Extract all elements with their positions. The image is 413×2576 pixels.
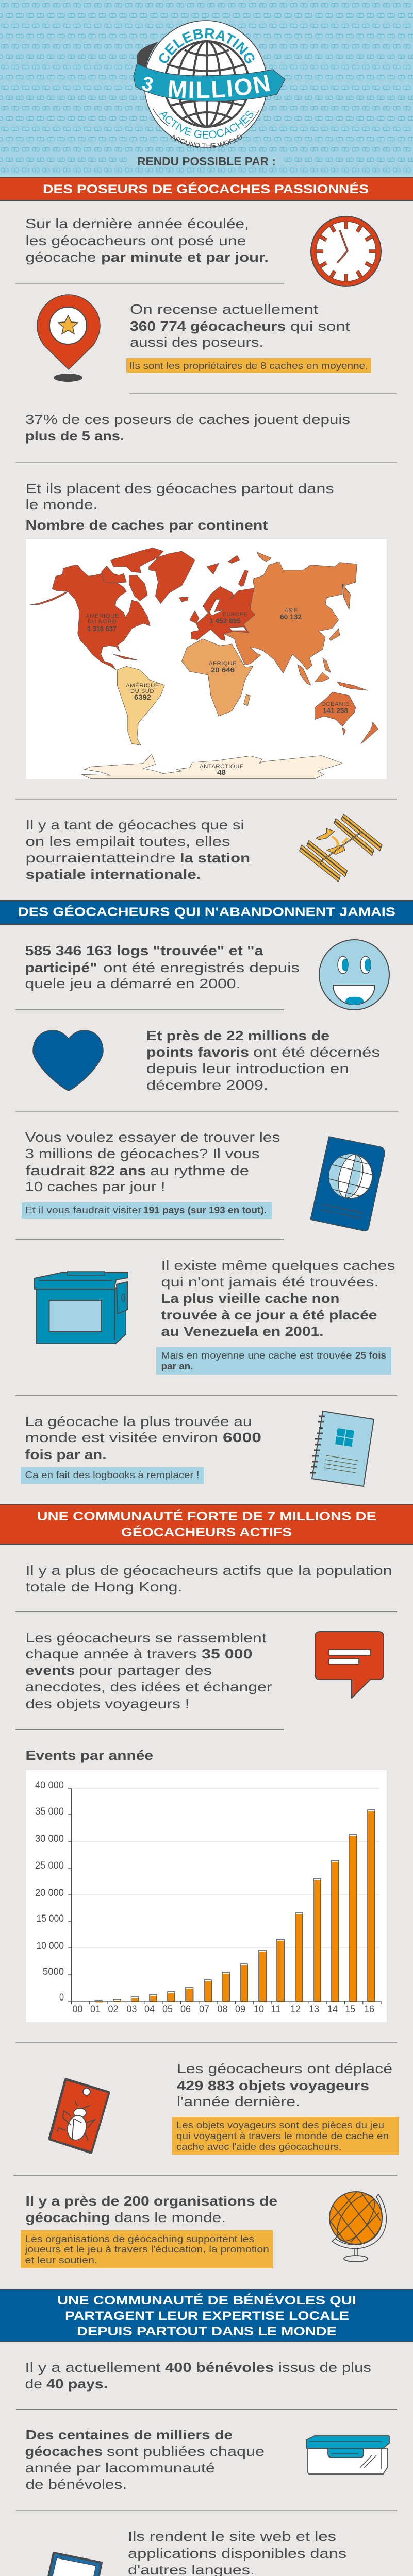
text block: 400 bénévoles: 40 pays.	[46, 2376, 108, 2392]
x axis labels: 10	[254, 2004, 264, 2015]
text block: hong kong: Il y a plus de géocacheurs actifs que la population	[26, 1563, 392, 1578]
text block: 200 organisations: dans le monde.	[114, 2210, 226, 2225]
text block: objets voyageurs: Les géocacheurs ont déplacé	[177, 2061, 392, 2076]
x axis labels: 02	[108, 2004, 119, 2015]
text block: 6000 fois	[25, 1414, 261, 1462]
text block: 585 346 163 logs: quele jeu a démarré en 2000.	[25, 976, 240, 991]
text block: 822 ans	[25, 1129, 280, 1194]
icon: lock box	[306, 2436, 389, 2474]
text block: par minute: les géocacheurs ont posé une	[26, 233, 246, 248]
panel: world map	[26, 539, 387, 779]
text block: station spatiale: spatiale internationale.	[26, 867, 201, 882]
text block: 6000 fois: monde est visitée environ	[25, 1430, 218, 1445]
heading: events par année: Events par année	[26, 1748, 153, 1763]
x axis labels: 12	[290, 2004, 301, 2015]
map label: amérique du sud: DU SUD	[130, 688, 154, 694]
x axis labels: 00	[72, 2004, 82, 2015]
callout: organisations: joueurs et le jeu à travers l'éducation, la promotion	[24, 2244, 269, 2255]
badge: celebrating 3 million: 3	[140, 73, 155, 96]
x axis labels: 04	[144, 2004, 155, 2015]
callout: 191 pays	[22, 1202, 272, 1219]
text block: centaines de milliers: sont publiées chaque	[107, 2444, 265, 2459]
heading: une communauté forte	[0, 1504, 413, 1545]
text: rendu possible par: RENDU POSSIBLE PAR :	[137, 155, 276, 168]
map: asia	[224, 552, 357, 685]
map: south america	[117, 666, 164, 745]
callout: objets voyageurs	[172, 2117, 399, 2155]
x axis labels: 01	[90, 2004, 101, 2015]
map label: antarctique: ANTARCTIQUE	[200, 764, 244, 770]
text block: centaines de milliers: de bénévoles.	[26, 2477, 127, 2492]
text block: cache non trouvée: La plus vieille cache non	[161, 1291, 339, 1306]
icon: desk globe	[329, 2189, 386, 2262]
text block: station spatiale: la station	[180, 850, 250, 866]
map label: antarctique	[200, 764, 244, 776]
text block: 360 774 géocacheurs: aussi des poseurs.	[130, 334, 263, 350]
x axis labels: 13	[309, 2004, 319, 2015]
text block: points favoris	[146, 1028, 380, 1093]
icon: smartphone	[37, 2553, 102, 2576]
heading: communauté de bénévoles: PARTAGENT LEUR EXPERTISE LOCALE	[65, 2309, 349, 2323]
text block: 35 000 events: Les géocacheurs se rassemblent	[26, 1630, 267, 1646]
callout: logbooks: Ca en fait des logbooks à remplacer !	[25, 1470, 199, 1480]
text block: 35 000 events: pour partager des	[79, 1663, 212, 1678]
icon: passport	[310, 1137, 385, 1231]
map: oceania	[315, 682, 378, 743]
y axis labels: 40 000	[35, 1780, 64, 1791]
callout: 25 fois par an	[156, 1347, 391, 1375]
heading: des poseurs	[0, 177, 413, 201]
text block: 35 000 events	[25, 1630, 272, 1711]
icon: ammo box cache	[35, 1272, 128, 1344]
heading: des poseurs: DES POSEURS DE GÉOCACHES PASSIONNÉS	[43, 182, 369, 196]
map label: amérique du nord	[86, 613, 119, 633]
map label: afrique	[209, 660, 237, 674]
text block: centaines de milliers: géocaches	[25, 2444, 103, 2459]
badge: celebrating 3 million: AROUND THE WORLD	[170, 135, 242, 148]
map label: europe	[209, 612, 247, 625]
text block: par minute: par minute et par jour.	[101, 249, 269, 265]
text block: 6000 fois: 6000	[223, 1430, 261, 1445]
callout: 191 pays: 191 pays (sur 193 en tout).	[143, 1205, 267, 1215]
text block: 35 000 events: 35 000	[202, 1646, 253, 1662]
x axis labels: 14	[327, 2004, 338, 2015]
icon: speech bubble	[315, 1632, 384, 1698]
text block: par minute: Sur la dernière année écoulée,	[25, 216, 249, 231]
text block: hong kong	[26, 1563, 392, 1595]
map label: europe: 1 452 895	[209, 617, 241, 625]
map: baltic and black sea	[209, 599, 246, 631]
text block: par minute	[25, 216, 269, 265]
map label: amérique du nord: AMÉRIQUE	[86, 613, 119, 619]
x axis labels: 06	[180, 2004, 191, 2015]
text block: cache non trouvée: qui n'ont jamais été trouvées.	[161, 1274, 378, 1290]
text block: points favoris: ont été décernés	[253, 1044, 380, 1060]
y axis labels: 20 000	[35, 1888, 64, 1899]
map label: asie: 60 132	[280, 613, 302, 621]
bar chart: events per year	[26, 1770, 387, 2022]
text block: 585 346 163 logs	[25, 943, 300, 991]
text block: 35 000 events: des objets voyageurs !	[26, 1696, 190, 1711]
text block: 200 organisations	[26, 2193, 277, 2225]
icon: space station	[300, 814, 382, 882]
y axis labels: 10 000	[36, 1941, 64, 1952]
text block: centaines de milliers: Des centaines de milliers de	[26, 2427, 233, 2443]
text block: 400 bénévoles: de	[25, 2376, 42, 2392]
badge: celebrating 3 million: ACTIVE GEOCACHES	[159, 110, 254, 139]
map: antarctica	[81, 754, 342, 779]
callout: organisations: et leur soutien.	[25, 2255, 97, 2265]
heading: nombre de caches: Nombre de caches par continent	[26, 517, 268, 533]
map label: amérique du sud: AMÉRIQUE	[126, 682, 159, 689]
text block: points favoris: depuis leur introduction en	[146, 1061, 349, 1076]
map label: afrique: 20 646	[211, 666, 235, 674]
y axis labels	[35, 1780, 64, 2003]
text block: 200 organisations: Il y a près de 200 organisations de	[26, 2193, 277, 2209]
text block: 37%	[25, 412, 350, 444]
map label: asie	[280, 607, 302, 621]
callout: logbooks	[21, 1467, 204, 1484]
map label: amérique du sud: 6392	[134, 693, 151, 701]
x axis labels	[72, 2004, 374, 2015]
x axis labels: 05	[162, 2004, 173, 2015]
x axis labels: 09	[235, 2004, 245, 2015]
text block: objets voyageurs	[177, 2061, 392, 2109]
text block: hong kong: totale de Hong Kong.	[26, 1579, 183, 1595]
y axis labels: 0	[59, 1992, 64, 2003]
text block: points favoris: points favoris	[146, 1044, 249, 1060]
text block: 200 organisations: géocaching	[26, 2210, 110, 2225]
text block: partout dans le monde: Et ils placent des géocaches partout dans	[26, 481, 334, 496]
text block: 585 346 163 logs: participé"	[25, 960, 97, 975]
y axis labels: 30 000	[35, 1834, 64, 1844]
heading: communauté de bénévoles: DEPUIS PARTOUT DANS LE MONDE	[77, 2325, 337, 2338]
map label: océanie: OCÉANIE	[321, 701, 350, 707]
text block: cache non trouvée	[161, 1258, 395, 1339]
text block: cache non trouvée: Il existe même quelques caches	[161, 1258, 395, 1273]
y axis labels: 35 000	[35, 1806, 64, 1817]
text block: objets voyageurs: l'année dernière.	[177, 2094, 300, 2109]
text block: 35 000 events: anecdotes, des idées et échanger	[25, 1679, 272, 1694]
heading: une communauté forte: UNE COMMUNAUTÉ FORTE DE 7 MILLIONS DE	[37, 1509, 376, 1523]
text block: 822 ans: faudrait	[26, 1163, 86, 1178]
text block: 6000 fois: fois par an.	[25, 1447, 106, 1462]
map label: antarctique: 48	[217, 769, 226, 776]
text block: points favoris: Et près de 22 millions de	[146, 1028, 329, 1043]
text block: 400 bénévoles: 400 bénévoles	[165, 2360, 274, 2375]
text block: 400 bénévoles	[25, 2360, 371, 2392]
text block: centaines de milliers	[25, 2427, 265, 2492]
text block: 360 774 géocacheurs: On recense actuellement	[130, 301, 319, 317]
text block: 37%: 37% de ces poseurs de caches jouent depuis	[25, 412, 350, 427]
x axis labels: 07	[199, 2004, 209, 2015]
text block: cache non trouvée: au Venezuela en 2001.	[161, 1324, 324, 1339]
callout: propriétaires	[126, 358, 371, 373]
x axis labels: 15	[345, 2004, 355, 2015]
callout: 25 fois par an: 25 fois	[355, 1350, 386, 1361]
text block: partout dans le monde: le monde.	[26, 497, 98, 512]
map label: océanie	[321, 701, 350, 715]
text block: 37%: plus de 5 ans.	[25, 428, 124, 444]
text block: objets voyageurs: 429 883 objets voyageurs	[177, 2078, 369, 2093]
text block: 400 bénévoles: issus de plus	[278, 2360, 371, 2375]
text block: 822 ans: 822 ans	[89, 1163, 146, 1178]
text block: station spatiale	[26, 817, 250, 882]
text block: autres langues: Ils rendent le site web et les	[128, 2529, 336, 2544]
x axis labels: 11	[271, 2004, 281, 2015]
map label: amérique du nord: DU NORD	[88, 619, 117, 625]
y axis labels: 15 000	[36, 1913, 64, 1924]
text block: partout dans le monde	[26, 481, 334, 512]
text block: station spatiale: Il y a tant de géocaches que si	[26, 817, 244, 833]
callout: 25 fois par an: par an.	[161, 1361, 193, 1371]
text block: 360 774 géocacheurs	[130, 301, 351, 350]
x axis labels: 16	[364, 2004, 374, 2015]
y axis labels: 25 000	[35, 1860, 64, 1871]
x axis labels: 03	[127, 2004, 137, 2015]
callout: organisations: Les organisations de géocaching supportent les	[25, 2234, 254, 2244]
badge: celebrating 3 million: MILLION	[168, 75, 270, 98]
text block: 822 ans: 3 millions de géocaches? Il vous	[25, 1146, 260, 1161]
map label: amérique du nord: 1 318 637	[87, 625, 117, 633]
text block: 400 bénévoles: Il y a actuellement	[25, 2360, 161, 2375]
bars	[95, 1810, 375, 2002]
x axis labels: 08	[218, 2004, 228, 2015]
text block: points favoris: décembre 2009.	[146, 1077, 268, 1093]
text block: station spatiale: pourraientatteindre	[26, 850, 175, 866]
text block: 822 ans: Vous voulez essayer de trouver les	[25, 1129, 280, 1145]
callout: objets voyageurs: qui voyagent à travers le monde de cache en	[176, 2131, 389, 2141]
text block: 360 774 géocacheurs: 360 774 géocacheurs	[130, 318, 286, 334]
map label: océanie: 141 258	[323, 707, 348, 715]
y axis labels: 5000	[43, 1967, 64, 1977]
map label: afrique: AFRIQUE	[209, 660, 237, 667]
text block: 35 000 events: chaque année à travers	[26, 1646, 197, 1662]
heading: géocacheurs qui n'abandonnent jamais: DES GÉOCACHEURS QUI N'ABANDONNENT JAMAIS	[18, 905, 395, 919]
text block: 822 ans: au rythme de	[150, 1163, 249, 1178]
map: europe	[190, 555, 255, 640]
icon: travel bug tag	[50, 2080, 108, 2152]
icon: heart	[33, 1030, 103, 1091]
icon: map pin	[37, 295, 100, 382]
text block: 360 774 géocacheurs: qui sont	[290, 318, 351, 334]
heading: géocacheurs qui n'abandonnent jamais	[0, 900, 413, 925]
text block: autres langues	[128, 2529, 346, 2576]
text block: station spatiale: on les empilait toutes, elles	[26, 834, 230, 849]
heading: communauté de bénévoles	[0, 2289, 413, 2342]
callout: 25 fois par an: Mais en moyenne une cache est trouvée	[161, 1350, 352, 1361]
icon: clock	[311, 216, 381, 286]
text block: 6000 fois: La géocache la plus trouvée au	[25, 1414, 252, 1429]
map label: amérique du sud	[126, 682, 159, 701]
text block: cache non trouvée: trouvée à ce jour a été placée	[161, 1307, 377, 1323]
callout: propriétaires: Ils sont les propriétaires de 8 caches en moyenne.	[129, 361, 368, 371]
map label: europe: EUROPE	[223, 612, 247, 618]
callout: objets voyageurs: Les objets voyageurs sont des pièces du jeu	[176, 2120, 384, 2130]
map: north america	[30, 548, 195, 670]
heading: communauté de bénévoles: UNE COMMUNAUTÉ DE BÉNÉVOLES QUI	[57, 2293, 356, 2308]
text block: 35 000 events: events	[26, 1663, 75, 1678]
text block: 822 ans: 10 caches par jour !	[25, 1179, 165, 1194]
icon: logbook	[310, 1411, 374, 1486]
icon: smiley	[319, 940, 389, 1010]
callout: objets voyageurs: cache avec l'aide des géocacheurs.	[176, 2142, 341, 2152]
panel: header	[0, 0, 413, 177]
text block: par minute: géocache	[26, 249, 96, 265]
map: africa	[182, 639, 253, 716]
text block: 585 346 163 logs: 585 346 163 logs "trouvée" et "a	[25, 943, 263, 958]
text block: 585 346 163 logs: ont été enregistrés depuis	[103, 960, 300, 975]
heading: une communauté forte: GÉOCACHEURS ACTIFS	[121, 1525, 292, 1539]
text block: centaines de milliers: année par lacommunauté	[25, 2460, 215, 2476]
callout: 191 pays: Et il vous faudrait visiter	[25, 1205, 141, 1215]
badge: celebrating 3 million	[133, 20, 286, 148]
callout: organisations	[21, 2230, 273, 2268]
badge: celebrating 3 million: CELEBRATING	[159, 28, 255, 64]
map label: asie: ASIE	[285, 607, 298, 614]
text block: autres langues: applications disponibles dans	[128, 2546, 346, 2561]
